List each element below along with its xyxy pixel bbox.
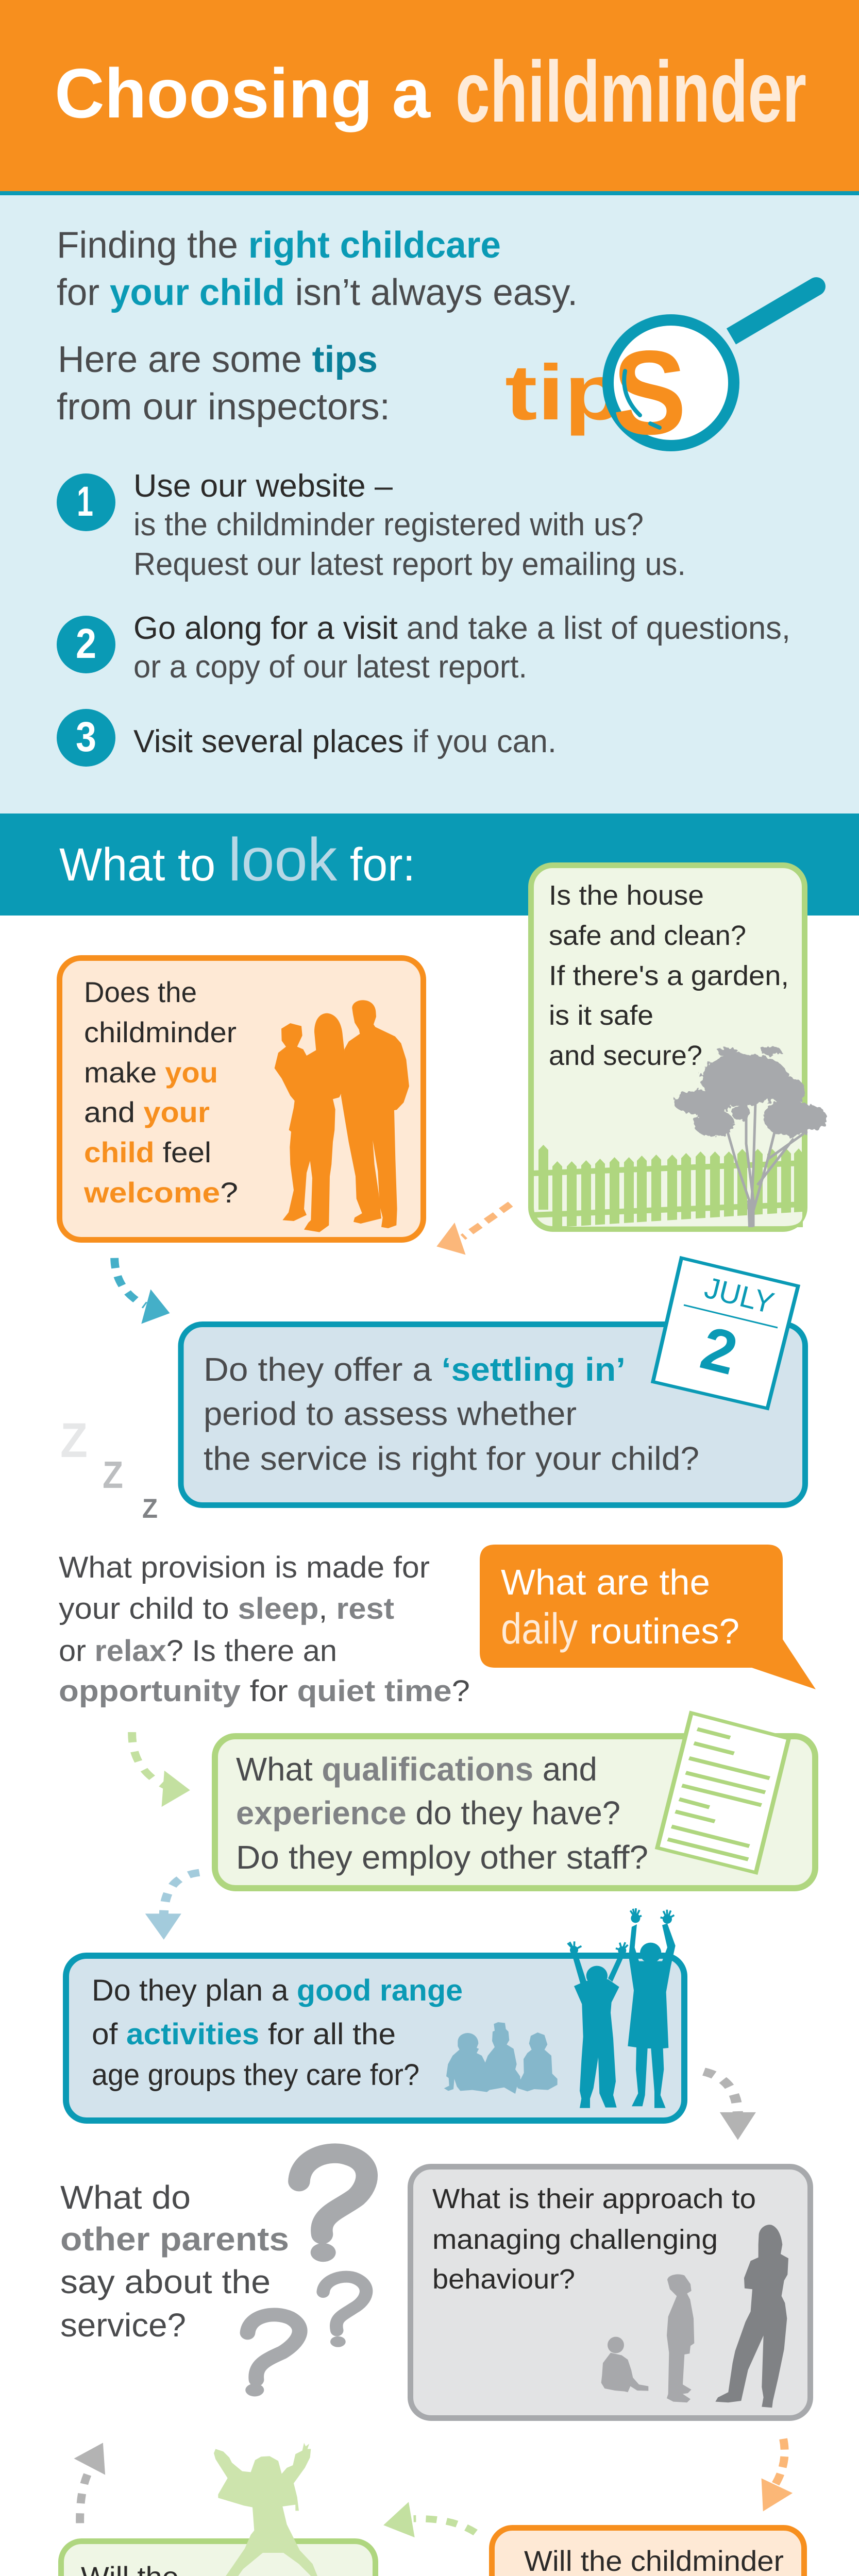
question text: Is the house bbox=[549, 880, 704, 911]
icon: fence bbox=[531, 1145, 803, 1227]
icon: calendar: 2 bbox=[695, 1314, 744, 1388]
question text: welcome ? bbox=[83, 1176, 238, 1209]
icon: children reaching up bbox=[568, 1908, 676, 2108]
header banner bbox=[0, 0, 859, 195]
tip 1 bbox=[57, 468, 686, 582]
question text: Does the bbox=[84, 976, 197, 1008]
question text: What is their approach to bbox=[432, 2183, 756, 2214]
text block: sleep and rest: opportunity for quiet time ? bbox=[59, 1674, 470, 1708]
text block: other parents bbox=[60, 2179, 289, 2344]
arrow: sleep to qualifications bbox=[132, 1732, 190, 1807]
arrow: behaviour to meals bbox=[762, 2439, 793, 2511]
question text: and your bbox=[84, 1096, 210, 1128]
icon: calendar bbox=[653, 1258, 798, 1409]
text block: sleep and rest: What provision is made for bbox=[59, 1551, 430, 1584]
icon: calendar: JULY bbox=[701, 1271, 778, 1320]
panel: settling in bbox=[181, 1258, 805, 1505]
question text: and secure? bbox=[549, 1040, 702, 1071]
speech bubble: daily routines: routines? bbox=[589, 1611, 739, 1651]
speech bubble: daily routines bbox=[480, 1545, 816, 1689]
arrow: qualifications to activities bbox=[145, 1873, 199, 1940]
question text: Do they plan a good range bbox=[92, 1974, 463, 2007]
tip 1: is the childminder registered with us? bbox=[133, 507, 644, 543]
section band: what to look for bbox=[0, 814, 859, 916]
intro text: for your child isn’t always easy. bbox=[57, 272, 578, 313]
text block: other parents: service? bbox=[60, 2307, 186, 2344]
tip 2: Go along for a visit and take a list of questions, bbox=[133, 611, 790, 646]
question text: Do they employ other staff? bbox=[236, 1839, 648, 1876]
icon: sleeping Zs: Z bbox=[142, 1494, 158, 1524]
question text: of activities for all the bbox=[92, 2018, 396, 2051]
icon: sleeping Zs: Z bbox=[60, 1413, 88, 1468]
tip 2: 2 bbox=[76, 620, 96, 667]
tip 1: Use our website – bbox=[133, 468, 393, 504]
question text: period to assess whether bbox=[204, 1395, 577, 1432]
tip 2: or a copy of our latest report. bbox=[133, 649, 527, 685]
arrow: meals to healthy food bbox=[383, 2502, 476, 2537]
question text: managing challenging bbox=[432, 2224, 718, 2255]
tip 1: Request our latest report by emailing us. bbox=[133, 547, 686, 582]
question text: childminder bbox=[84, 1016, 237, 1048]
question text: Do they offer a ‘settling in’ bbox=[204, 1351, 626, 1388]
tip 3 bbox=[57, 709, 557, 767]
panel: healthy food and exercise bbox=[61, 2443, 473, 2576]
icon: adult and children silhouettes bbox=[601, 2225, 788, 2408]
icon: document bbox=[658, 1713, 789, 1873]
icon: sitting children bbox=[444, 2022, 558, 2094]
tip 2 bbox=[57, 611, 790, 685]
tip 3: Visit several places if you can. bbox=[133, 724, 557, 759]
icon: magnifying glass over tips: tip bbox=[505, 349, 624, 436]
question text: If there's a garden, bbox=[549, 960, 789, 991]
icon: question marks bbox=[245, 2154, 367, 2396]
intro text: from our inspectors: bbox=[57, 386, 390, 428]
icon: tree bbox=[673, 1046, 826, 1227]
panel: meals and snacks bbox=[492, 2528, 804, 2576]
question text: is it safe bbox=[549, 1000, 653, 1031]
panel: house safe and clean bbox=[531, 866, 826, 1229]
question text: age groups they care for? bbox=[92, 2058, 419, 2092]
panel: qualifications bbox=[215, 1713, 815, 1888]
question text: child feel bbox=[84, 1136, 211, 1168]
text block: other parents: other parents bbox=[60, 2221, 289, 2258]
question text bbox=[83, 976, 238, 1209]
question text bbox=[92, 1974, 463, 2092]
icon: sleeping Zs bbox=[60, 1413, 158, 1524]
icon: magnifying glass over tips bbox=[505, 277, 826, 460]
panel: tips bbox=[0, 195, 859, 814]
question text: behaviour? bbox=[432, 2264, 575, 2295]
question text: experience do they have? bbox=[236, 1794, 620, 1832]
text block: other parents: say about the bbox=[60, 2263, 271, 2300]
tip 1: 1 bbox=[77, 478, 93, 525]
icon: magnifying glass over tips: S bbox=[613, 326, 686, 460]
question text bbox=[204, 1351, 699, 1477]
text block: sleep and rest bbox=[59, 1551, 470, 1708]
arrow: activities to behaviour bbox=[704, 2072, 756, 2140]
arrow: green box to orange box bbox=[436, 1204, 511, 1255]
title bbox=[55, 43, 806, 140]
tip 3: 3 bbox=[76, 714, 96, 760]
question text bbox=[432, 2183, 756, 2295]
panel: welcome bbox=[60, 958, 424, 1240]
title: Choosing a bbox=[55, 54, 431, 132]
text block: other parents: What do bbox=[60, 2179, 191, 2216]
intro text: Finding the right childcare bbox=[57, 225, 501, 266]
intro text bbox=[57, 225, 578, 428]
icon: family silhouette bbox=[275, 1000, 409, 1232]
speech bubble: daily routines: daily bbox=[501, 1604, 578, 1653]
icon: jumping child bbox=[209, 2443, 336, 2576]
arrow: orange box to settling in bbox=[114, 1258, 170, 1324]
section band: what to look for: What to look for: bbox=[59, 826, 415, 894]
question text: make you bbox=[84, 1056, 218, 1089]
question text bbox=[549, 880, 789, 1071]
text block: sleep and rest: your child to sleep, rest bbox=[59, 1592, 394, 1625]
panel: challenging behaviour bbox=[410, 2167, 810, 2418]
icon: sleeping Zs: Z bbox=[103, 1453, 123, 1496]
intro text: Here are some tips bbox=[58, 339, 378, 380]
text block: sleep and rest: or relax? Is there an bbox=[59, 1634, 337, 1668]
question text: safe and clean? bbox=[549, 920, 746, 951]
panel: activities bbox=[66, 1908, 684, 2121]
question text bbox=[236, 1751, 648, 1876]
speech bubble: daily routines: What are the bbox=[501, 1562, 710, 1602]
question text: the service is right for your child? bbox=[204, 1440, 699, 1477]
arrow: exercise to other parents bbox=[74, 2443, 105, 2523]
question text: What qualifications and bbox=[236, 1751, 597, 1788]
